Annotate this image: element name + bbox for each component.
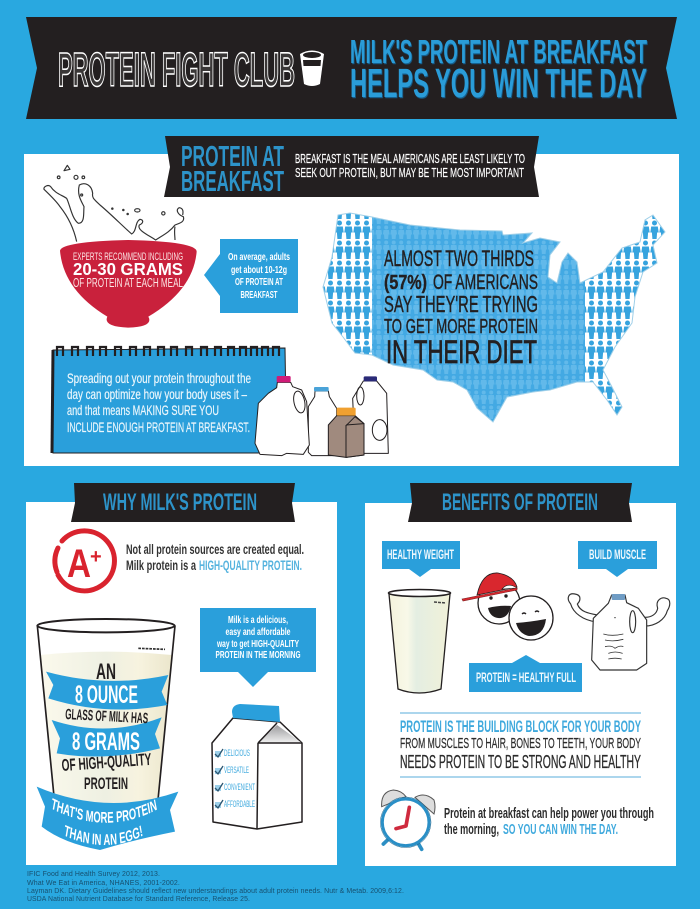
banner: protein at breakfast: PROTEIN AT (181, 141, 284, 173)
jug right (353, 381, 388, 453)
banner: why milk's protein: WHY MILK'S PROTEIN (103, 489, 257, 516)
notebook callout: day can optimize how your body uses it – (67, 386, 247, 402)
icon: big milk glass with ribbons: GLASS OF MILK HAS (65, 706, 149, 727)
icon: big milk glass with ribbons: AN (96, 659, 116, 684)
top banner: PROTEIN FIGHT CLUB (58, 44, 295, 97)
icon: red bowl: EXPERTS RECOMMEND INCLUDING (73, 251, 183, 263)
map text: TO GET MORE PROTEIN (384, 316, 538, 338)
big jug (255, 382, 309, 456)
label: healthy weight: HEALTHY WEIGHT (387, 547, 454, 562)
icon: red bowl: OF PROTEIN AT EACH MEAL (73, 275, 183, 290)
checklist: DELICIOUS (224, 748, 250, 758)
icon: big milk glass with ribbons: THAT'S MORE PROTEIN (52, 798, 157, 823)
footnotes: Layman DK. Dietary Guidelines should reflect new understandings about adult protein needs. Nutr & Metab. 2009,6:12. (27, 888, 404, 895)
checklist: VERSATILE (224, 765, 249, 775)
map text: ALMOST TWO THIRDS (384, 246, 534, 271)
headline (350, 33, 647, 106)
text: building block (400, 713, 641, 777)
icon: alarm clock (380, 790, 435, 849)
icon: A+ grade (55, 531, 114, 591)
callout: delicious easy affordable: way to get HIGH-QUALITY (216, 638, 299, 650)
panel: protein at breakfast (24, 154, 679, 466)
callout: average adults: On average, adults (228, 251, 290, 263)
label: protein = healthy full: PROTEIN = HEALTHY FULL (476, 670, 576, 685)
icon: milk glass (388, 590, 450, 693)
icon: red bowl (60, 240, 197, 328)
icon: A+ grade: A (67, 542, 91, 586)
panel: why milk's protein (26, 502, 337, 865)
notebook spiral rings (57, 347, 279, 356)
map text: OF AMERICANS (433, 271, 538, 294)
callout: average adults: get about 10-12g (231, 264, 287, 276)
ribbon: 8 grams (52, 717, 162, 757)
ribbon: 8 ounce (46, 672, 168, 710)
map text: IN THEIR DIET (386, 334, 537, 370)
notebook callout (52, 347, 286, 453)
banner: why milk's protein (71, 483, 295, 522)
text: high quality protein: HIGH-QUALITY PROTEIN. (199, 557, 302, 573)
callout: average adults: BREAKFAST (240, 290, 278, 301)
map text (384, 246, 538, 370)
footnotes: IFIC Food and Health Survey 2012, 2013. (27, 871, 160, 878)
banner: protein at breakfast (164, 136, 539, 198)
text: win the day: the morning, (444, 822, 499, 838)
banner: benefits of protein (408, 483, 632, 522)
footnotes: What We Eat in America, NHANES, 2001-2002. (27, 880, 180, 887)
callout: delicious easy affordable (200, 608, 316, 687)
checklist (215, 748, 255, 809)
icon: milk splash (44, 165, 184, 242)
banner: protein at breakfast: SEEK OUT PROTEIN, BUT MAY BE THE MOST IMPORTANT (295, 165, 524, 180)
footnotes (27, 871, 404, 903)
map text: SAY THEY'RE TRYING (384, 291, 538, 317)
text: high quality protein (126, 541, 304, 573)
map of america (322, 212, 666, 423)
icon: milk jugs and carton (255, 376, 388, 457)
text: win the day: SO YOU CAN WIN THE DAY. (503, 822, 618, 838)
label: protein = healthy full (469, 655, 582, 692)
brown carton (328, 416, 364, 457)
label: healthy weight (382, 541, 460, 577)
icon: A+ grade: + (90, 546, 102, 568)
callout: average adults (204, 239, 298, 313)
ribbon: that's more protein (37, 787, 178, 850)
icon: big milk glass with ribbons: 8 OUNCE (75, 681, 138, 709)
icon: muscular milk jug (568, 594, 670, 670)
icon: milk carton checklist (212, 704, 302, 829)
text: high quality protein: Milk protein is a (126, 557, 196, 573)
bottle middle (308, 391, 337, 456)
label: build muscle: BUILD MUSCLE (589, 547, 646, 562)
icon: red bowl: 20-30 GRAMS (73, 259, 183, 279)
icon: big milk glass with ribbons: 8 GRAMS (72, 728, 140, 756)
notebook callout: and that means MAKING SURE YOU (67, 402, 219, 418)
map text: (57%) (384, 272, 427, 294)
icon: big milk glass with ribbons: OF HIGH-QUALITY (61, 750, 152, 775)
callout: delicious easy affordable: easy and affordable (226, 626, 291, 638)
notebook callout: Spreading out your protein throughout the (67, 370, 251, 386)
callout: delicious easy affordable: PROTEIN IN THE MORNING (216, 649, 300, 661)
checklist: CONVENIENT (224, 782, 255, 792)
checklist: AFFORDABLE (224, 799, 255, 809)
panel: benefits of protein (365, 503, 676, 866)
callout: delicious easy affordable: Milk is a delicious, (228, 614, 288, 626)
label: build muscle (578, 541, 657, 577)
banner: protein at breakfast: BREAKFAST (181, 166, 284, 198)
icon: smiling faces (462, 573, 553, 640)
icon: big milk glass with ribbons: PROTEIN (84, 774, 128, 793)
icon: big milk glass with ribbons (36, 618, 178, 850)
icon: big milk glass with ribbons: THAN IN AN EGG! (65, 825, 142, 845)
top banner (26, 17, 677, 119)
callout: average adults: OF PROTEIN AT (235, 277, 283, 288)
text: high quality protein: Not all protein sources are created equal. (126, 541, 304, 557)
icon: milk glass (300, 50, 324, 86)
notebook callout: INCLUDE ENOUGH PROTEIN AT BREAKFAST. (67, 419, 250, 435)
footnotes: USDA National Nutrient Database for Standard Reference, Release 25. (27, 896, 250, 903)
banner: protein at breakfast: BREAKFAST IS THE MEAL AMERICANS ARE LEAST LIKELY TO (295, 151, 525, 166)
text: win the day (444, 806, 654, 838)
